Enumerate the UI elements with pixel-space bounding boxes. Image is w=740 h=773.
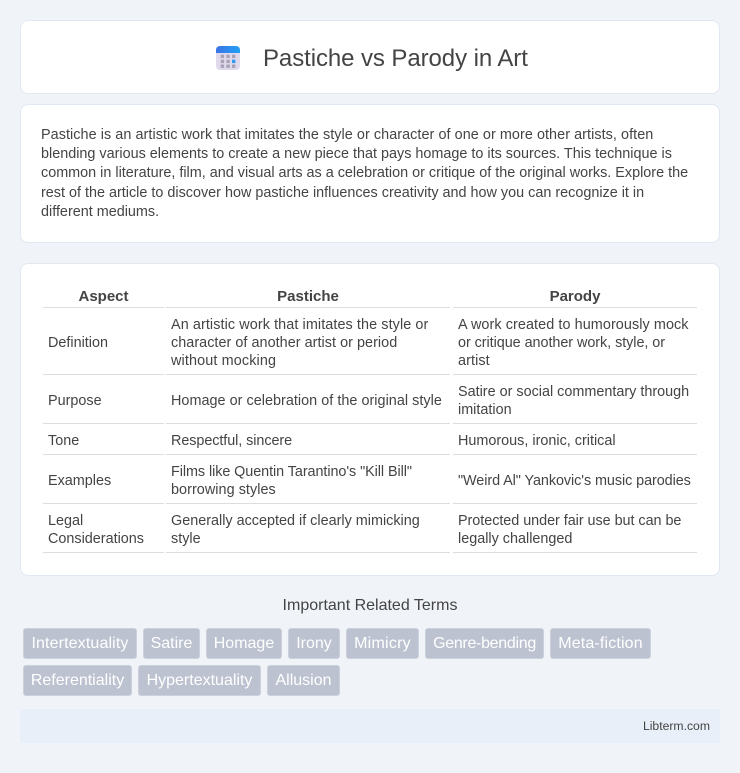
table header: Pastiche: Pastiche [277, 288, 339, 305]
table row: Legal Considerations: Considerations [48, 531, 144, 547]
table row: Tone [43, 433, 697, 455]
table row: Legal Considerations [43, 513, 697, 553]
related term tags [23, 628, 651, 696]
text block: introduction: Pastiche is an artistic work that imitates the style or character of one or more other artists, often [41, 127, 653, 143]
related term tags: Hypertextuality [147, 672, 252, 689]
related term tags: Genre-bending [433, 635, 536, 652]
panel: header [20, 20, 720, 94]
table row: Definition: Definition [48, 335, 108, 351]
text block: introduction [41, 127, 688, 220]
table row: Examples: borrowing styles [171, 482, 276, 498]
related term tags: Meta-fiction [558, 635, 643, 652]
table row: Purpose: Satire or social commentary through [458, 384, 689, 400]
table row: Definition [43, 317, 697, 375]
panel: introduction [20, 104, 720, 243]
table row: Definition: A work created to humorously mock [458, 317, 689, 333]
table row: Definition: or critique another work, style, or [458, 335, 665, 351]
table row: Legal Considerations: Protected under fair use but can be [458, 513, 681, 529]
table row: Legal Considerations: Generally accepted if clearly mimicking [171, 513, 420, 529]
related term tags: Allusion [275, 672, 332, 689]
related term tags: Mimicry [354, 635, 411, 652]
table row: Purpose: imitation [458, 402, 512, 418]
table header: Parody [453, 288, 697, 308]
table row: Examples: "Weird Al" Yankovic's music parodies [458, 473, 691, 489]
table row: Definition: without mocking [171, 353, 276, 369]
table row: Purpose: Purpose [48, 393, 102, 409]
heading: related terms: Important Related Terms [283, 597, 457, 614]
table header: Pastiche [166, 288, 450, 308]
table header: Parody: Parody [550, 288, 600, 305]
table row: Tone: Tone [48, 433, 79, 449]
table row: Definition: An artistic work that imitates the style or [171, 317, 428, 333]
table row: Examples [43, 464, 697, 504]
table row: Legal Considerations: legally challenged [458, 531, 572, 547]
table row: Definition: artist [458, 353, 490, 369]
footer [20, 709, 720, 743]
related term tags: Referentiality [31, 672, 124, 689]
table row: Purpose: Homage or celebration of the original style [171, 393, 442, 409]
title: Pastiche vs Parody in Art [263, 45, 528, 72]
table row: Purpose [43, 384, 697, 424]
table row: Examples: Examples [48, 473, 111, 489]
table header: Aspect: Aspect [78, 288, 129, 305]
table row: Tone: Humorous, ironic, critical [458, 433, 616, 449]
text block: introduction: rest of the article to discover how pastiche influences creativity and how you can recognize it in [41, 185, 644, 201]
panel: comparison table [20, 263, 720, 576]
footer credit: Libterm.com [643, 719, 710, 733]
related term tags: Intertextuality [31, 635, 129, 652]
table row: Legal Considerations: style [171, 531, 201, 547]
table row: Tone: Respectful, sincere [171, 433, 292, 449]
related term tags: Satire [151, 635, 192, 652]
icon: calendar [216, 46, 240, 70]
text block: introduction: different mediums. [41, 204, 159, 220]
table row: Examples: Films like Quentin Tarantino's "Kill Bill" [171, 464, 412, 480]
table row: Definition: character of another artist or period [171, 335, 397, 351]
table row: Legal Considerations: Legal [48, 513, 83, 529]
related term tags: Homage [214, 635, 274, 652]
table header: Aspect [43, 288, 164, 308]
text block: introduction: blending various elements to create a new piece that pays homage to its sources. This technique is [41, 146, 672, 162]
related term tags: Irony [296, 635, 332, 652]
text block: introduction: common in literature, film, and visual arts as a celebration or critique of the original works. Explore the [41, 165, 688, 181]
